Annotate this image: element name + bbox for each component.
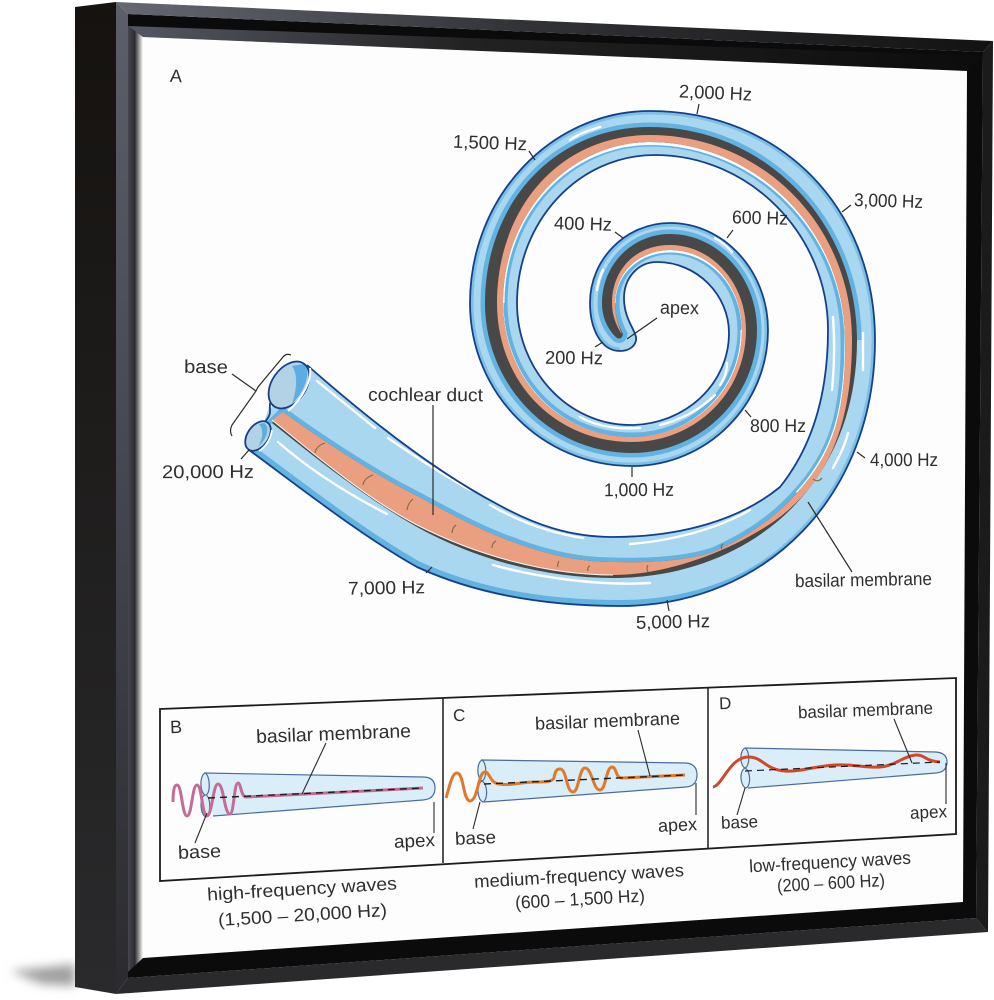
membrane ribs: [315, 443, 822, 572]
main diagram frequency labels: 20,000 Hz: [162, 461, 254, 482]
panel D: low-frequency waves: D: [719, 694, 732, 713]
scala highlights: [278, 127, 863, 584]
panel C: medium-frequency waves: apex: [658, 814, 697, 836]
panels frame: [160, 678, 956, 881]
main diagram frequency labels: 400 Hz: [554, 212, 612, 235]
panel D: low-frequency waves: basilar membrane: [798, 698, 933, 722]
panel D: low-frequency waves: [713, 694, 948, 833]
panel captions: [207, 848, 911, 930]
main diagram frequency labels: [162, 80, 938, 633]
panel captions: medium-frequency waves: [474, 860, 684, 892]
tube outline: [249, 111, 875, 606]
panel B: high-frequency waves: basilar membrane: [256, 721, 411, 748]
panel B: high-frequency waves: B: [170, 717, 182, 737]
panel captions: low-frequency waves: [749, 848, 911, 876]
main diagram frequency labels: cochlear duct: [368, 384, 483, 405]
main diagram frequency labels: 800 Hz: [750, 415, 806, 436]
panel captions: (600 – 1,500 Hz): [515, 886, 645, 913]
panel captions: (200 – 600 Hz): [777, 870, 885, 896]
main diagram leader lines: [230, 104, 865, 611]
panel A label: A: [170, 66, 182, 86]
panel C: medium-frequency waves: basilar membrane: [535, 708, 680, 734]
main diagram frequency labels: 4,000 Hz: [870, 449, 938, 470]
base openings of the tube: [240, 354, 318, 456]
panel C: medium-frequency waves: base: [455, 827, 496, 849]
panel captions: (1,500 – 20,000 Hz): [218, 900, 387, 930]
panel captions: high-frequency waves: [207, 873, 397, 905]
main diagram frequency labels: apex: [660, 297, 700, 318]
main diagram frequency labels: basilar membrane: [795, 568, 932, 591]
panel D: low-frequency waves: base: [721, 811, 758, 833]
panel C: medium-frequency waves: C: [453, 706, 466, 725]
panel D: low-frequency waves: apex: [910, 801, 948, 823]
main diagram frequency labels: 200 Hz: [545, 347, 603, 368]
cast shadow of frame: [10, 964, 75, 986]
main diagram frequency labels: 5,000 Hz: [636, 610, 710, 633]
main diagram frequency labels: 3,000 Hz: [854, 189, 923, 212]
main diagram frequency labels: 600 Hz: [732, 206, 788, 229]
main diagram frequency labels: 2,000 Hz: [679, 80, 752, 105]
main diagram frequency labels: 1,000 Hz: [604, 479, 674, 500]
panel C: medium-frequency waves: [446, 706, 697, 849]
panel B: high-frequency waves: base: [178, 840, 221, 863]
panel B: high-frequency waves: [170, 717, 436, 863]
main diagram frequency labels: 1,500 Hz: [453, 131, 527, 154]
inner highlight line along membrane: [502, 144, 846, 493]
cochlea spiral tube: [249, 111, 875, 606]
panel B: high-frequency waves: apex: [394, 829, 436, 852]
main diagram frequency labels: 7,000 Hz: [348, 576, 425, 599]
light blue below the base membrane: [272, 340, 857, 578]
main diagram frequency labels: base: [184, 356, 228, 377]
basilar membrane band: dark and salmon layers: [272, 127, 857, 578]
white line between salmon and dark at base: [272, 420, 613, 575]
canvas: [143, 37, 967, 958]
